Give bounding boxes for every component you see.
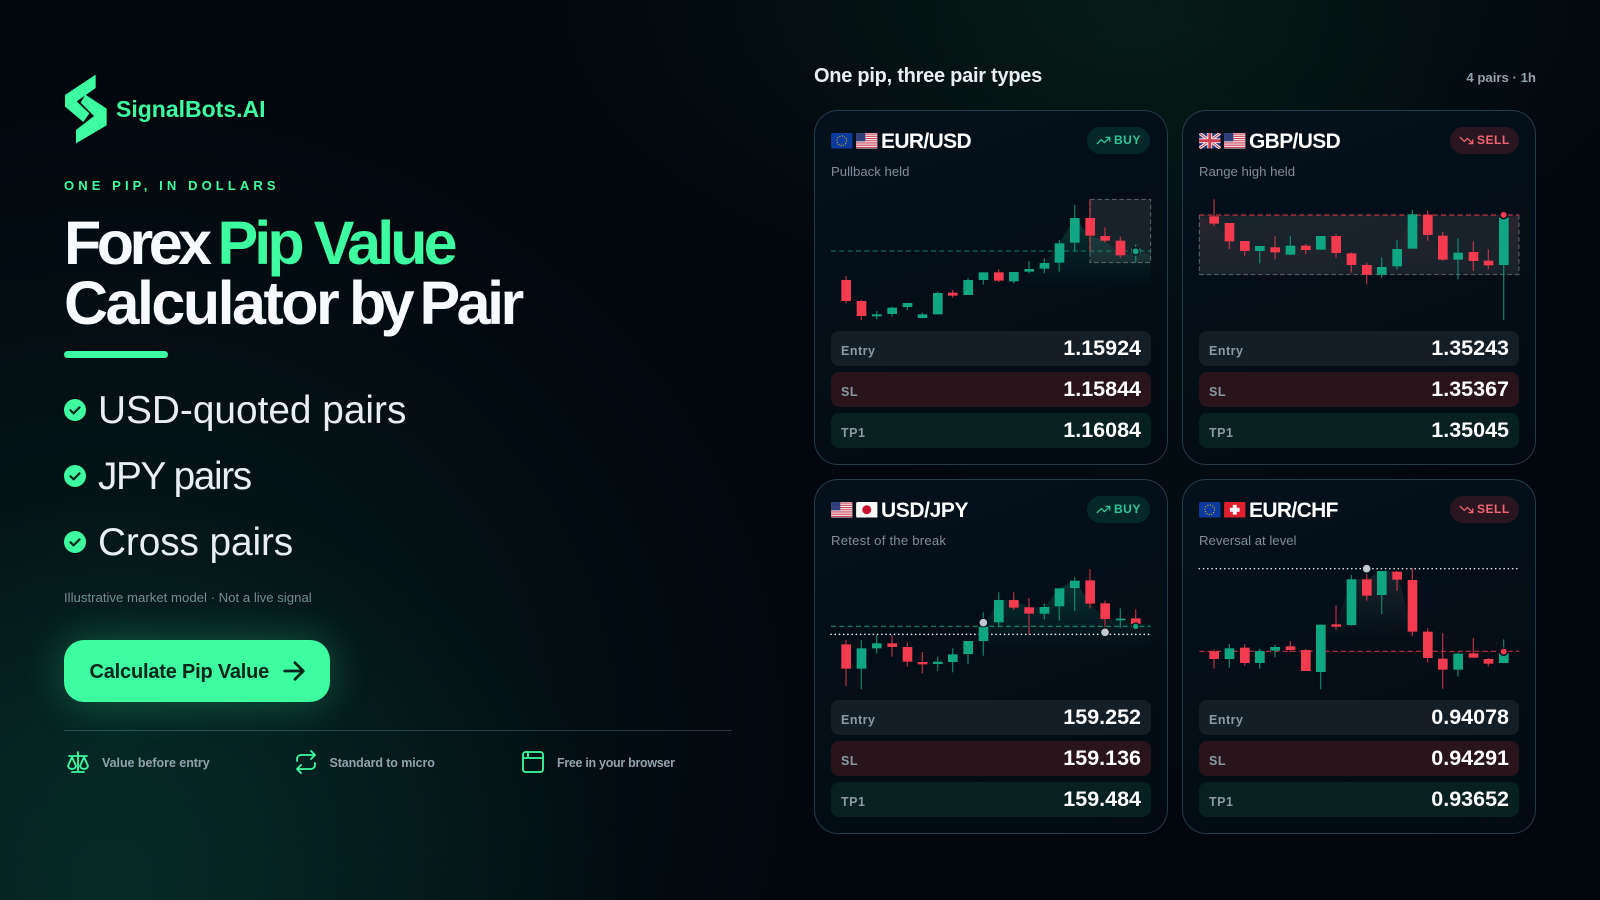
icon: arrow right xyxy=(283,661,305,681)
flags: EU and Switzerland xyxy=(1199,502,1246,518)
section meta: 4 pairs · 1h xyxy=(1466,70,1536,85)
eyebrow: ONE PIP, IN DOLLARS xyxy=(64,178,280,193)
feature: value before entry xyxy=(67,751,210,773)
title: Pair xyxy=(420,268,521,336)
setup note: Retest of the break xyxy=(831,533,946,548)
panel: USD/JPY card xyxy=(814,479,1168,834)
list item: Cross pairs: Cross pairs xyxy=(98,521,293,564)
price row: entry xyxy=(1199,331,1519,366)
logo: SignalBots.AI xyxy=(65,74,266,144)
brand name: SignalBots.AI xyxy=(116,96,266,122)
title: Pip Value xyxy=(218,208,454,276)
badge: sell: SELL xyxy=(1477,502,1510,516)
price row: stop loss: SL xyxy=(841,384,858,398)
panel: EUR/CHF card xyxy=(1182,479,1536,834)
feature: standard to micro xyxy=(296,750,435,774)
price row: entry: Entry xyxy=(1209,344,1243,358)
price row: entry xyxy=(831,331,1151,366)
badge: sell: SELL xyxy=(1477,133,1510,147)
price row: stop loss: 0.94291 xyxy=(1431,746,1509,770)
disclaimer note: Illustrative market model · Not a live signal xyxy=(64,590,312,605)
badge: buy: BUY xyxy=(1114,502,1141,516)
badge: sell xyxy=(1450,496,1519,523)
setup note: Reversal at level xyxy=(1199,533,1296,548)
price row: stop loss: 1.15844 xyxy=(1063,377,1141,401)
list item: JPY pairs: JPY pairs xyxy=(98,455,251,498)
pair name: EUR/CHF xyxy=(1249,499,1338,522)
price row: take profit: 1.35045 xyxy=(1431,418,1509,442)
candlestick chart xyxy=(831,198,1152,320)
badge: buy xyxy=(1087,496,1150,523)
price row: entry: Entry xyxy=(1209,712,1243,726)
price row: stop loss xyxy=(1199,372,1519,407)
pair name: USD/JPY xyxy=(881,499,968,522)
price row: stop loss: SL xyxy=(841,754,858,768)
feature: standard to micro: Standard to micro xyxy=(330,756,435,770)
price row: stop loss xyxy=(831,372,1151,407)
price row: take profit xyxy=(831,782,1151,817)
title xyxy=(64,208,524,336)
price row: entry: 1.15924 xyxy=(1063,336,1141,360)
feature list xyxy=(64,389,406,564)
icon: S chevron mark xyxy=(65,74,107,144)
pair name: EUR/USD xyxy=(881,130,971,153)
flags: EU and US xyxy=(831,133,878,148)
price row: take profit: 1.16084 xyxy=(1063,418,1141,442)
price row: stop loss: 159.136 xyxy=(1063,746,1141,770)
flags: US and Japan xyxy=(831,502,878,518)
price row: stop loss: SL xyxy=(1209,754,1226,768)
badge: sell xyxy=(1450,127,1519,154)
badge: buy: BUY xyxy=(1114,133,1141,147)
price row: take profit xyxy=(831,413,1151,448)
price row: take profit: 159.484 xyxy=(1063,787,1141,811)
pair name: GBP/USD xyxy=(1249,130,1340,153)
price row: take profit: 0.93652 xyxy=(1431,787,1509,811)
price row: take profit xyxy=(1199,413,1519,448)
price row: entry: 0.94078 xyxy=(1431,705,1509,729)
price row: entry: 1.35243 xyxy=(1431,336,1509,360)
title: Forex xyxy=(64,208,208,276)
feature: value before entry: Value before entry xyxy=(102,756,210,770)
flags: UK and US xyxy=(1199,133,1246,149)
price row: entry: Entry xyxy=(841,712,875,726)
price row: take profit: TP1 xyxy=(841,426,865,440)
candlestick chart xyxy=(830,569,1151,690)
price row: entry xyxy=(1199,700,1519,735)
badge: buy xyxy=(1087,127,1150,154)
price row: entry: 159.252 xyxy=(1063,705,1141,729)
setup note: Pullback held xyxy=(831,164,909,179)
candlestick chart xyxy=(1198,199,1520,320)
panel: GBP/USD card xyxy=(1182,110,1536,465)
button: Calculate Pip Value xyxy=(64,640,330,702)
candlestick chart xyxy=(1198,564,1519,690)
panel: EUR/USD card xyxy=(814,110,1168,465)
title: Calculator xyxy=(64,268,337,336)
price row: take profit: TP1 xyxy=(1209,426,1233,440)
price row: stop loss: 1.35367 xyxy=(1431,377,1509,401)
button label: Calculate Pip Value xyxy=(90,661,269,683)
list item: USD-quoted pairs: USD-quoted pairs xyxy=(98,389,406,432)
price row: stop loss xyxy=(831,741,1151,776)
feature: free in your browser xyxy=(522,751,675,773)
title: by xyxy=(349,268,409,336)
price row: stop loss xyxy=(1199,741,1519,776)
price row: stop loss: SL xyxy=(1209,384,1226,398)
price row: entry xyxy=(831,700,1151,735)
price row: take profit: TP1 xyxy=(1209,794,1233,808)
price row: entry: Entry xyxy=(841,344,875,358)
price row: take profit: TP1 xyxy=(841,794,865,808)
price row: take profit xyxy=(1199,782,1519,817)
feature: free in your browser: Free in your browser xyxy=(557,756,675,770)
setup note: Range high held xyxy=(1199,164,1295,179)
accent underline xyxy=(64,351,168,358)
section heading: One pip, three pair types xyxy=(814,65,1042,87)
